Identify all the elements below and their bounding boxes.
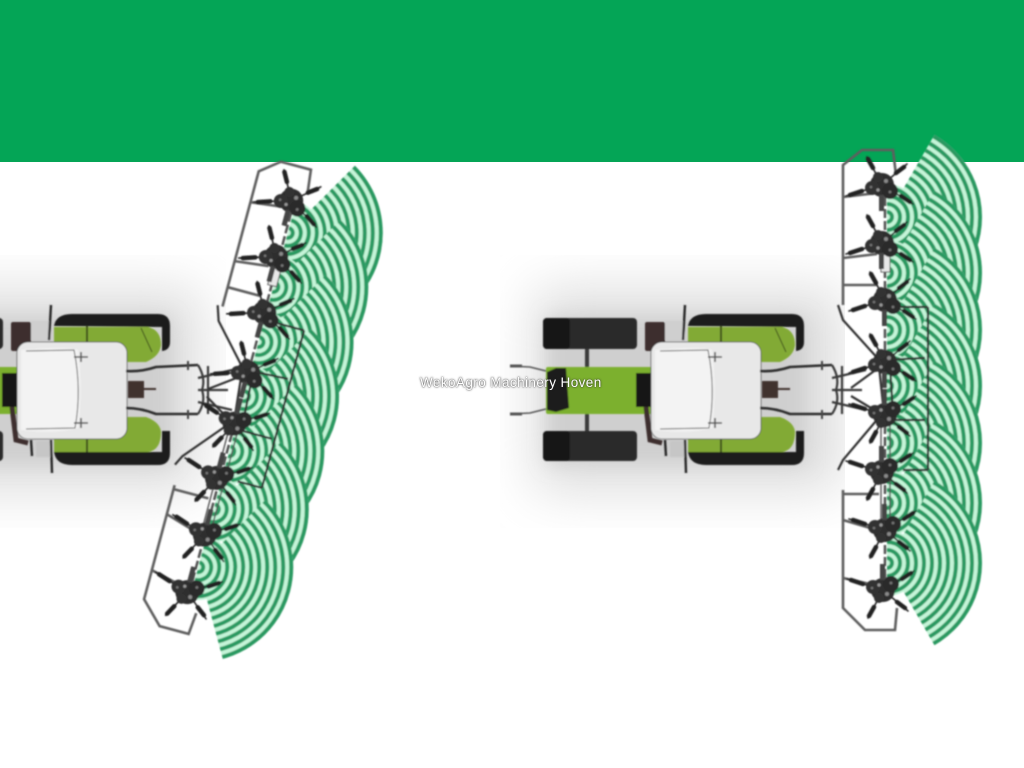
tractor, cab and hitch (right) <box>510 305 866 473</box>
rotary rake frame and rotors (right, straight) <box>838 150 928 630</box>
swath fans (left, angled) <box>82 117 404 683</box>
left machine: tractor with angled rake <box>0 117 404 683</box>
swath fans (right, straight) <box>792 122 982 658</box>
grey shadow backdrop: left tractor <box>0 290 200 490</box>
right machine: tractor with straight rake <box>510 122 982 658</box>
rotary rake frame and rotors (left, angled) <box>134 155 345 642</box>
green header band <box>0 0 1024 162</box>
watermark text: WekoAgro Machinery Hoven <box>420 375 602 390</box>
tractor, cab and hitch (left) <box>0 305 232 473</box>
grey shadow backdrop: right tractor <box>535 290 840 490</box>
